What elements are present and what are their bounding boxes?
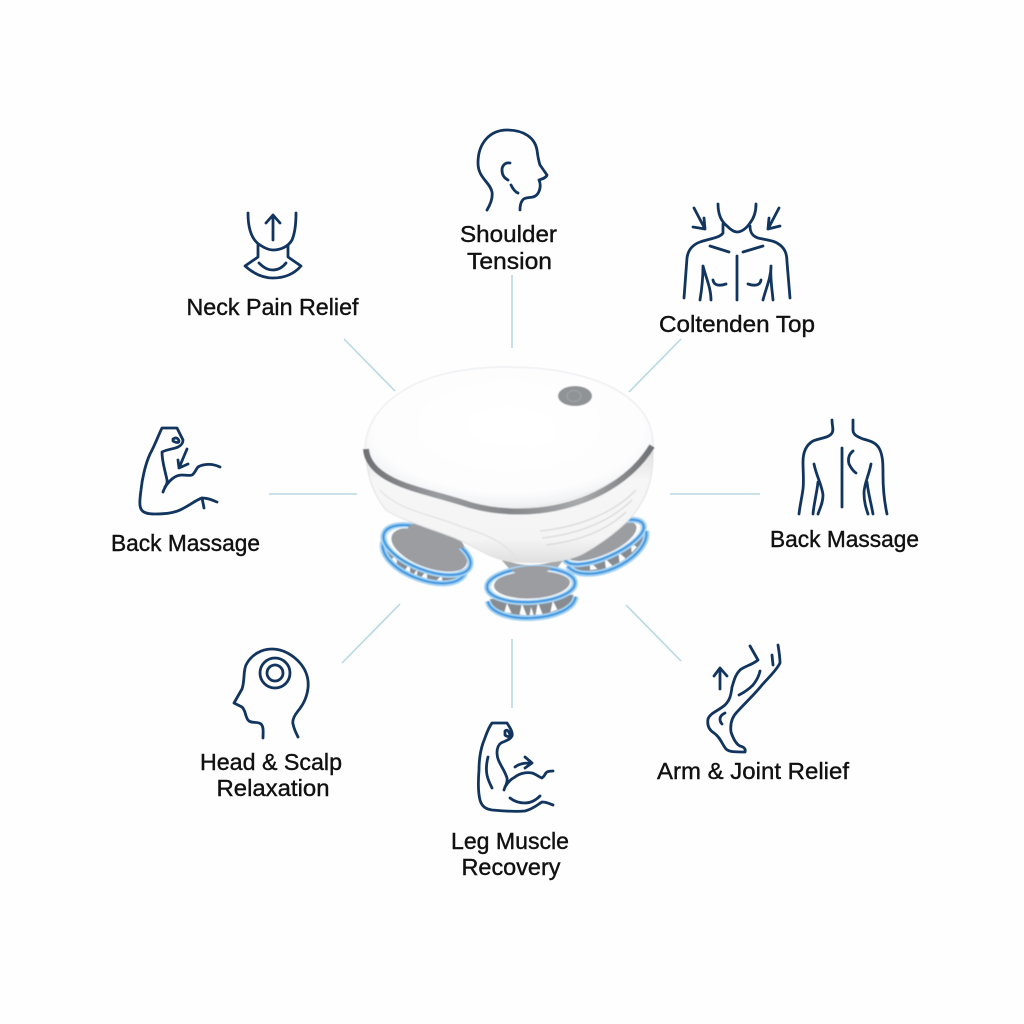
label: head and scalp relaxation: Head & Scalp [200, 749, 342, 775]
body rib details [380, 490, 636, 558]
center massage pad [486, 556, 577, 620]
metallic band [366, 446, 652, 512]
label: back massage right: Back Massage [770, 526, 919, 552]
label: coltenden top: Coltenden Top [659, 311, 815, 337]
label: leg muscle recovery: Recovery [462, 854, 561, 880]
label: back massage left: Back Massage [111, 530, 260, 556]
label: leg muscle recovery [451, 828, 569, 880]
label: shoulder tension [460, 221, 557, 274]
connector lines [269, 275, 760, 708]
label: head and scalp relaxation [200, 749, 342, 801]
label: arm and joint relief: Arm & Joint Relief [657, 758, 849, 784]
icon: head profile [478, 130, 547, 210]
label: shoulder tension: Tension [467, 248, 552, 274]
label: leg muscle recovery: Leg Muscle [451, 828, 569, 854]
icon: flexed bicep with right arrow [478, 723, 553, 811]
label: neck pain relief: Neck Pain Relief [186, 294, 359, 320]
shell highlights [504, 414, 556, 446]
left massage pad [373, 508, 480, 594]
massager device [365, 367, 655, 620]
icon: back torso [799, 420, 887, 514]
label: shoulder tension: Shoulder [460, 221, 557, 247]
icon: flexed arm with down arrow [140, 428, 220, 514]
body lower housing [366, 445, 653, 563]
power button [558, 386, 592, 406]
body top shell [365, 367, 653, 509]
right massage pad [558, 510, 655, 585]
icon: head with target [234, 649, 308, 738]
icon: chest and shoulders [684, 204, 790, 300]
icon: neck with up arrow [245, 213, 301, 278]
icon: leg with up arrow [708, 645, 780, 752]
label: head and scalp relaxation: Relaxation [216, 775, 330, 801]
